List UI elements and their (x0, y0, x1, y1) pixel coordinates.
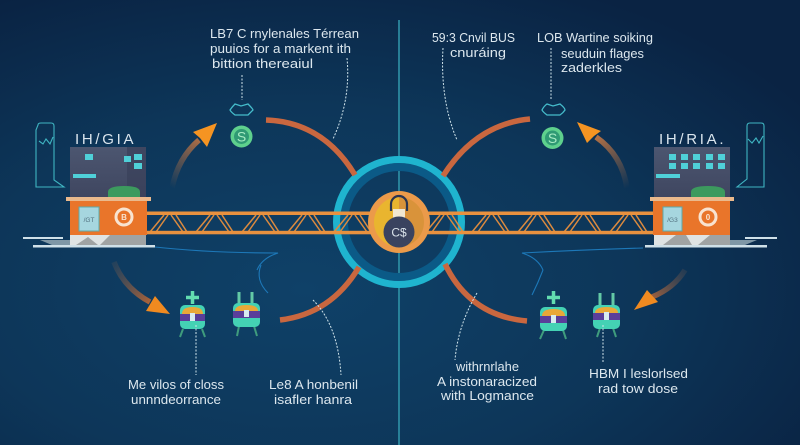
text: bottom right: HBM I leslorlsed (589, 366, 688, 381)
curved arrow: top right (577, 122, 627, 188)
blue wave lines (155, 247, 643, 295)
left building (23, 147, 155, 248)
text: top right: seuduin flages (561, 46, 644, 61)
icon: left cloud outline (230, 104, 253, 115)
dotted leader lines (196, 48, 603, 375)
text: bottom center left: Le8 A honbenil (269, 377, 358, 392)
text: bottom left (128, 377, 224, 407)
curved arrow: top left (172, 123, 217, 188)
icon: right tower outline (737, 123, 764, 187)
icon: left tower outline (36, 123, 64, 187)
text: bottom center right: withrnrlahe (455, 359, 519, 374)
center divider line (398, 20, 400, 445)
text: top center right: cnuráing (450, 45, 506, 60)
icon: battery with prongs, left (233, 292, 260, 336)
text: bottom center right: with Logmance (440, 388, 534, 403)
curved arrow: bottom left (114, 262, 170, 314)
connector arcs (266, 119, 530, 321)
text: top left (210, 26, 359, 71)
icon: right coin: S (548, 130, 557, 146)
icon: battery with prongs, right (593, 293, 620, 337)
curved arrow: bottom right (634, 270, 685, 310)
right building label: IH/RIA. (659, 131, 725, 148)
text: bottom right: rad tow dose (598, 381, 678, 396)
text: bottom center left (269, 377, 358, 407)
left building: /GT (84, 217, 94, 224)
text: top left: puuios for a markent ith (210, 41, 351, 56)
text: bottom right (589, 366, 688, 396)
left building: B (121, 213, 127, 222)
text: bottom left: Me vilos of closs (128, 377, 224, 392)
icon: right coin (542, 127, 564, 149)
text: top center right: 59:3 Cnvil BUS (432, 30, 515, 45)
text: bottom center right: A instonaracized (437, 374, 537, 389)
icon: left coin (230, 126, 252, 148)
right building: /G3 (667, 217, 678, 224)
right building: 0 (706, 213, 711, 222)
text: bottom center right (437, 359, 537, 403)
text: bottom left: unnndeorrance (131, 392, 221, 407)
left building label: IH/GIA (75, 131, 135, 148)
text: top center right (432, 30, 515, 60)
icon: battery with plus, left (180, 291, 205, 337)
lock medallion (368, 191, 430, 253)
text: top left: bittion thereaiul (212, 56, 313, 71)
text: top right: LOB Wartine soiking (537, 30, 653, 45)
right building (645, 147, 777, 248)
text: bottom center left: isafler hanra (274, 392, 353, 407)
bridge truss (147, 212, 654, 234)
icon: battery with plus, right (540, 291, 567, 339)
lock medallion: C$ (391, 226, 407, 240)
icon: right cloud outline (542, 104, 565, 115)
central ring (336, 160, 462, 284)
text: top right: zaderkles (561, 60, 623, 75)
text: top left: LB7 C rnylenales Térrean (210, 26, 359, 41)
text: top right (537, 30, 653, 75)
icon: left coin: S (237, 128, 246, 144)
